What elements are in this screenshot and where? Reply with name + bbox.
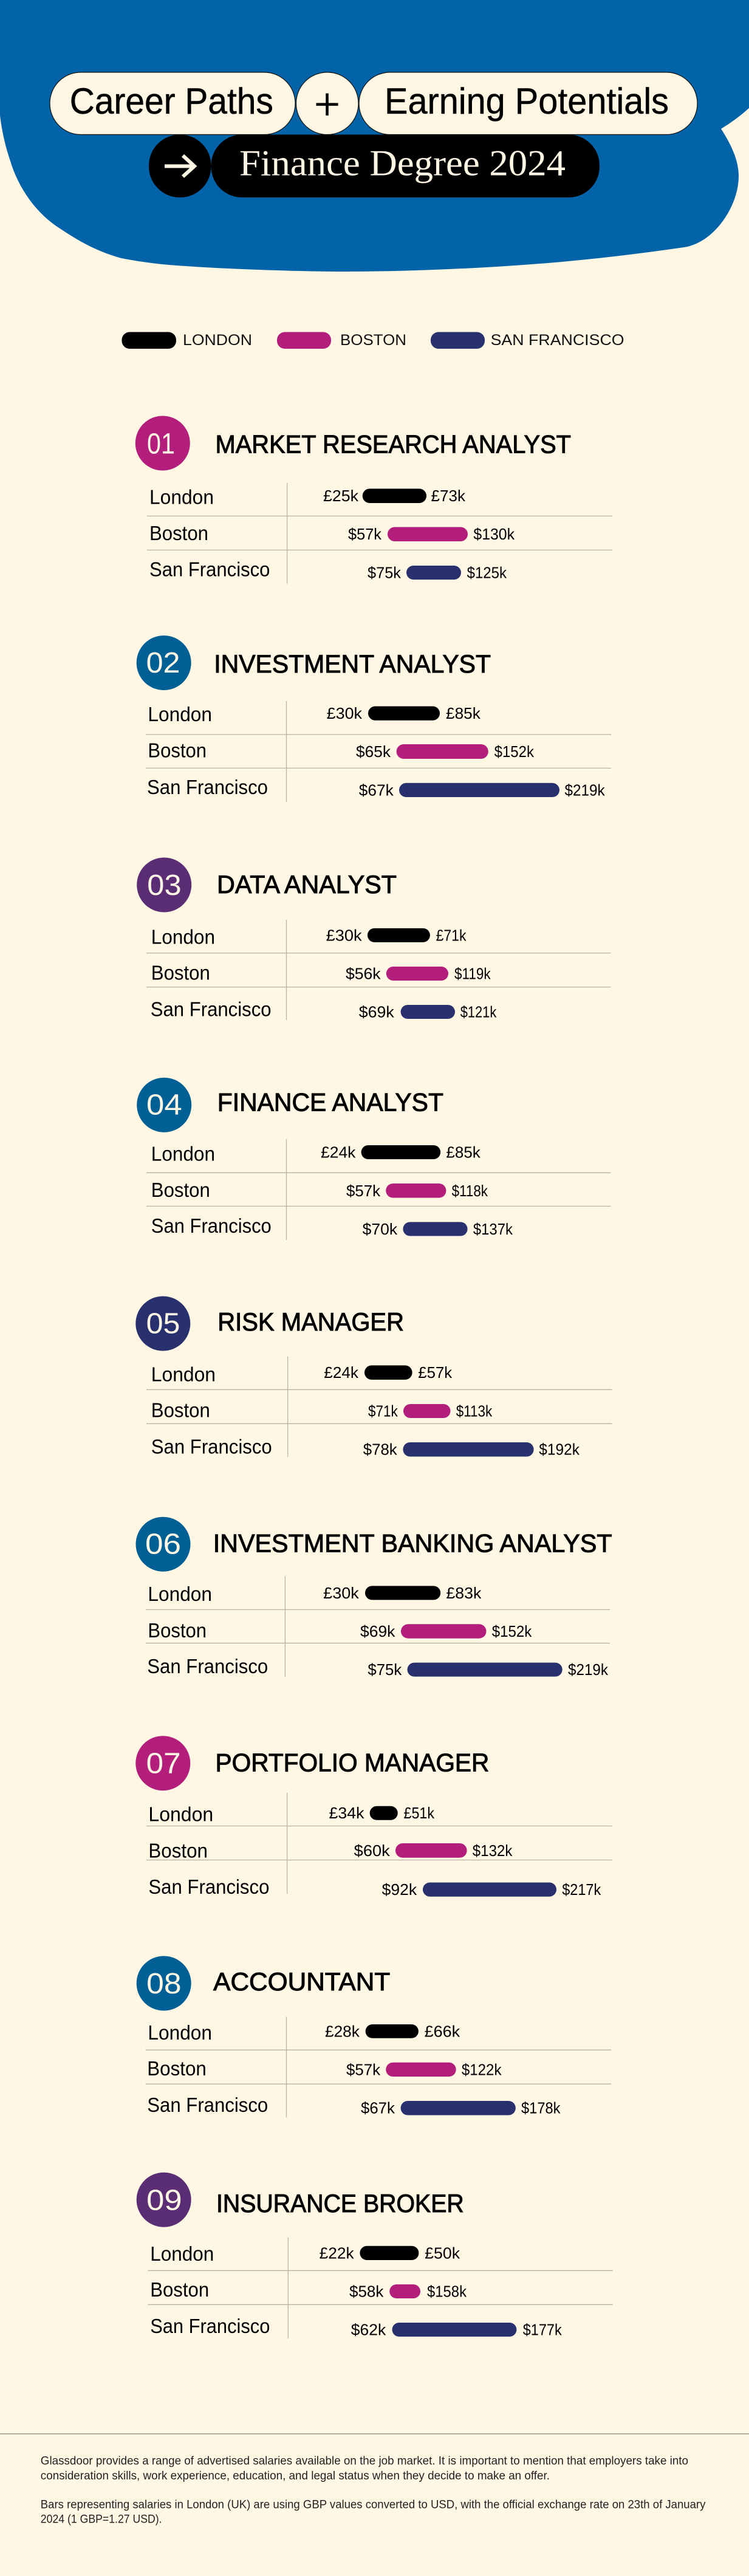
row: Boston: $56k [346, 965, 381, 983]
badge 05: 05 [146, 1307, 180, 1340]
legend: SAN FRANCISCO [491, 332, 624, 349]
panel: 09 insurance broker [137, 2173, 613, 2339]
heading: DATA ANALYST [217, 870, 397, 899]
row: London: £83k [446, 1584, 482, 1602]
row: Boston [148, 1839, 513, 1862]
row: Boston: $152k [494, 742, 535, 761]
row: London: £24k [321, 1143, 356, 1162]
badge 03: 03 [147, 869, 182, 902]
badge 05 [135, 1297, 190, 1351]
footnote: Glassdoor provides a range of advertised salaries available on the job market. It is important to mention that employers take into [41, 2455, 688, 2468]
pill: Career Paths: Career Paths [70, 81, 273, 122]
panel: 05 risk manager [135, 1297, 612, 1459]
badge 04 [137, 1078, 191, 1132]
row: Boston: Boston [150, 2278, 209, 2301]
heading: INSURANCE BROKER [216, 2189, 464, 2218]
badge 09 [137, 2173, 191, 2227]
row: San Francisco: $177k [523, 2321, 563, 2339]
row: Boston [148, 1619, 532, 1642]
footnote [41, 2455, 706, 2526]
row: London: London [149, 486, 214, 509]
badge 04: 04 [146, 1089, 182, 1122]
row: London: £25k [323, 487, 359, 505]
badge 01: 01 [147, 428, 175, 460]
row: Boston: $71k [368, 1402, 398, 1420]
row: Boston [147, 2057, 502, 2080]
row: London [149, 486, 466, 509]
row: San Francisco: $92k [382, 1880, 417, 1899]
row: San Francisco: $192k [539, 1440, 580, 1459]
panel: 07 portfolio manager [135, 1736, 612, 1899]
row: San Francisco: $121k [460, 1002, 497, 1021]
row: San Francisco: San Francisco [148, 1875, 269, 1898]
row: San Francisco: $219k [565, 781, 606, 799]
row: Boston: Boston [151, 1399, 210, 1421]
row: San Francisco: $70k [363, 1220, 398, 1238]
row: London: London [150, 2242, 214, 2265]
row: San Francisco: $75k [368, 564, 402, 582]
row: San Francisco: San Francisco [147, 2094, 268, 2116]
footnote: consideration skills, work experience, education, and legal status when they decide to make an offer. [41, 2470, 550, 2482]
row: San Francisco: San Francisco [149, 558, 270, 581]
pill: Career Paths [50, 72, 295, 135]
row: San Francisco: San Francisco [147, 776, 268, 798]
row: London: £30k [326, 926, 363, 944]
badge 07: 07 [146, 1747, 181, 1780]
row: Boston: $158k [427, 2282, 467, 2300]
row: San Francisco: $62k [351, 2321, 386, 2339]
row: Boston [151, 961, 491, 984]
panel: 02 investment analyst [137, 635, 611, 802]
badge 01 [135, 416, 190, 470]
row: San Francisco [151, 1435, 580, 1459]
row: London: £71k [436, 926, 467, 944]
row: Boston: Boston [149, 522, 208, 544]
legend: LONDON [183, 332, 252, 349]
pill: Finance Degree 2024 [211, 135, 600, 197]
row: San Francisco [151, 998, 497, 1021]
header blob [0, 0, 749, 272]
pill: plus [296, 72, 358, 135]
row: San Francisco: San Francisco [151, 998, 272, 1020]
row: London: £24k [324, 1363, 359, 1382]
legend: BOSTON [340, 332, 406, 349]
badge 06 [136, 1517, 191, 1572]
row: London [151, 1363, 453, 1385]
heading: INVESTMENT BANKING ANALYST [213, 1529, 612, 1558]
row: Boston [151, 1399, 493, 1421]
row: Boston: $69k [360, 1622, 395, 1640]
row: Boston: $113k [456, 1402, 493, 1420]
row: London [148, 2021, 460, 2044]
row: San Francisco: San Francisco [150, 2315, 270, 2337]
row: London [151, 1142, 481, 1165]
pill: plus: + [313, 78, 341, 130]
badge 03 [137, 858, 191, 913]
row: London: London [148, 1803, 213, 1825]
heading: PORTFOLIO MANAGER [215, 1748, 489, 1776]
row: San Francisco [147, 2094, 561, 2117]
row: Boston: Boston [151, 961, 210, 984]
row: Boston [150, 2278, 467, 2301]
row: London: £22k [320, 2244, 355, 2262]
row: San Francisco: $78k [363, 1440, 398, 1459]
row: London: £66k [425, 2022, 460, 2040]
row: San Francisco: $217k [562, 1880, 601, 1899]
row: Boston [148, 739, 535, 762]
row: London: London [151, 926, 215, 948]
row: Boston: $57k [346, 1182, 381, 1200]
row: San Francisco: $67k [361, 2099, 395, 2117]
row: London: £28k [325, 2022, 360, 2040]
panel: 06 investment banking analyst [136, 1517, 612, 1679]
row: San Francisco: $67k [359, 781, 394, 799]
row: Boston [151, 1179, 488, 1201]
row: San Francisco [148, 1875, 601, 1899]
row: London [148, 703, 481, 725]
footnote: Bars representing salaries in London (UK) are using GBP values converted to USD, with the official exchange rate on 23th of January [41, 2499, 706, 2512]
heading: FINANCE ANALYST [217, 1088, 443, 1116]
row: San Francisco: $69k [359, 1002, 395, 1021]
row: San Francisco [149, 558, 507, 582]
legend [121, 332, 624, 349]
row: Boston: Boston [151, 1179, 210, 1201]
title [50, 72, 697, 197]
row: Boston: $152k [492, 1622, 532, 1640]
row: Boston: $58k [349, 2282, 384, 2300]
row: London: £73k [431, 487, 466, 505]
badge 06: 06 [145, 1529, 181, 1560]
row: London: £50k [425, 2244, 460, 2262]
badge 08: 08 [146, 1968, 182, 2000]
row: Boston: $57k [346, 2060, 381, 2078]
row: San Francisco: $125k [467, 564, 507, 582]
row: San Francisco: $219k [568, 1660, 609, 1679]
footnote: 2024 (1 GBP=1.27 USD). [41, 2513, 162, 2526]
row: Boston: $65k [356, 742, 391, 761]
badge 09: 09 [146, 2185, 182, 2216]
row: San Francisco [150, 2315, 563, 2339]
row: Boston: $132k [473, 1841, 513, 1860]
row: San Francisco: $75k [368, 1660, 402, 1679]
row: London: £85k [446, 1143, 481, 1162]
row: Boston: $57k [348, 525, 382, 543]
pill: Earning Potentials: Earning Potentials [385, 81, 669, 122]
row: Boston: Boston [148, 1619, 207, 1642]
row: Boston: Boston [148, 739, 207, 762]
badge 02: 02 [146, 647, 180, 679]
row: London: £57k [418, 1363, 453, 1382]
badge 07 [135, 1736, 190, 1790]
row: London: £30k [327, 704, 363, 722]
row: San Francisco [147, 1655, 609, 1679]
heading: MARKET RESEARCH ANALYST [215, 430, 571, 458]
row: London: £34k [329, 1804, 365, 1822]
heading: RISK MANAGER [217, 1307, 404, 1336]
row: London [148, 1583, 482, 1605]
row: San Francisco: San Francisco [151, 1435, 272, 1458]
row: London: London [151, 1363, 216, 1385]
panel: 03 data analyst [137, 858, 610, 1021]
pill: Finance Degree 2024: Finance Degree 2024 [239, 143, 566, 183]
row: London: London [148, 1583, 212, 1605]
row: Boston: $122k [462, 2060, 502, 2078]
row: San Francisco [147, 776, 606, 799]
row: London [148, 1803, 435, 1825]
panel: 04 finance analyst [137, 1078, 610, 1240]
badge 02 [137, 635, 191, 690]
row: San Francisco [151, 1214, 513, 1238]
panel: 01 market research analyst [135, 416, 612, 583]
row: Boston: $130k [473, 525, 515, 543]
row: London [150, 2242, 460, 2265]
heading: ACCOUNTANT [213, 1967, 390, 1996]
row: London: London [148, 703, 212, 725]
row: London: London [151, 1142, 215, 1165]
row: Boston [149, 522, 515, 544]
row: London: £30k [323, 1584, 360, 1602]
row: London: London [148, 2021, 212, 2044]
row: London [151, 926, 467, 948]
panel: 08 accountant [137, 1956, 611, 2117]
row: San Francisco: San Francisco [151, 1214, 272, 1237]
row: San Francisco: San Francisco [147, 1655, 268, 1677]
row: London: £51k [403, 1804, 435, 1822]
icon: arrow [149, 135, 211, 197]
row: Boston: Boston [147, 2057, 207, 2080]
row: London: £85k [446, 704, 481, 722]
pill: Earning Potentials [359, 72, 697, 135]
row: San Francisco: $178k [521, 2099, 561, 2117]
badge 08 [137, 1956, 191, 2011]
heading: INVESTMENT ANALYST [214, 649, 491, 678]
row: Boston: $60k [354, 1841, 391, 1860]
row: Boston: $118k [452, 1182, 488, 1200]
row: Boston: $119k [454, 965, 491, 983]
row: San Francisco: $137k [473, 1220, 513, 1238]
row: Boston: Boston [148, 1839, 208, 1862]
